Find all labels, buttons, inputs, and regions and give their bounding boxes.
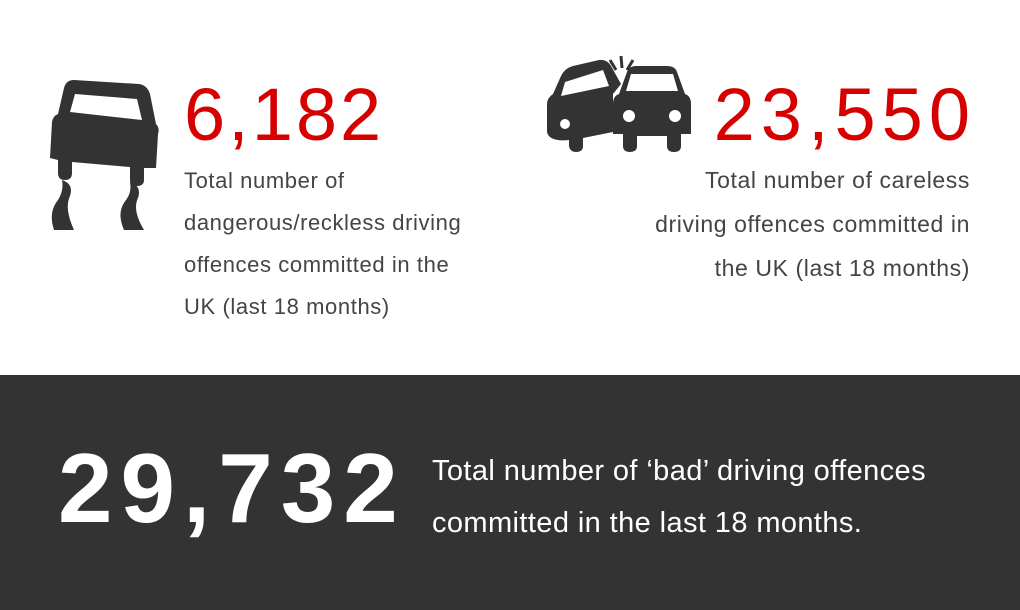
text: careless driving description: the UK (last 18 months): [715, 255, 970, 281]
text: careless driving description: Total number of careless: [705, 167, 970, 193]
text: careless driving description: [655, 167, 970, 281]
icon: skidding car: [50, 80, 159, 230]
text: total description: [432, 455, 926, 539]
text: total description: Total number of ‘bad’ driving offences: [432, 455, 926, 487]
stat: dangerous driving: [184, 73, 461, 319]
text: dangerous driving description: Total number of: [184, 168, 345, 193]
text: dangerous driving description: [184, 168, 461, 319]
text: dangerous driving description: UK (last 18 months): [184, 294, 390, 319]
number: 6,182: 6,182: [184, 73, 384, 156]
text: dangerous driving description: offences committed in the: [184, 252, 449, 277]
text: dangerous driving description: dangerous/reckless driving: [184, 210, 461, 235]
stat: careless driving: [655, 73, 976, 281]
panel: total band: [0, 375, 1020, 610]
number: 23,550: 23,550: [714, 73, 976, 156]
number: 29,732: 29,732: [58, 433, 406, 543]
text: careless driving description: driving offences committed in: [655, 211, 970, 237]
text: total description: committed in the last 18 months.: [432, 507, 862, 539]
icon: car collision: [547, 56, 691, 152]
